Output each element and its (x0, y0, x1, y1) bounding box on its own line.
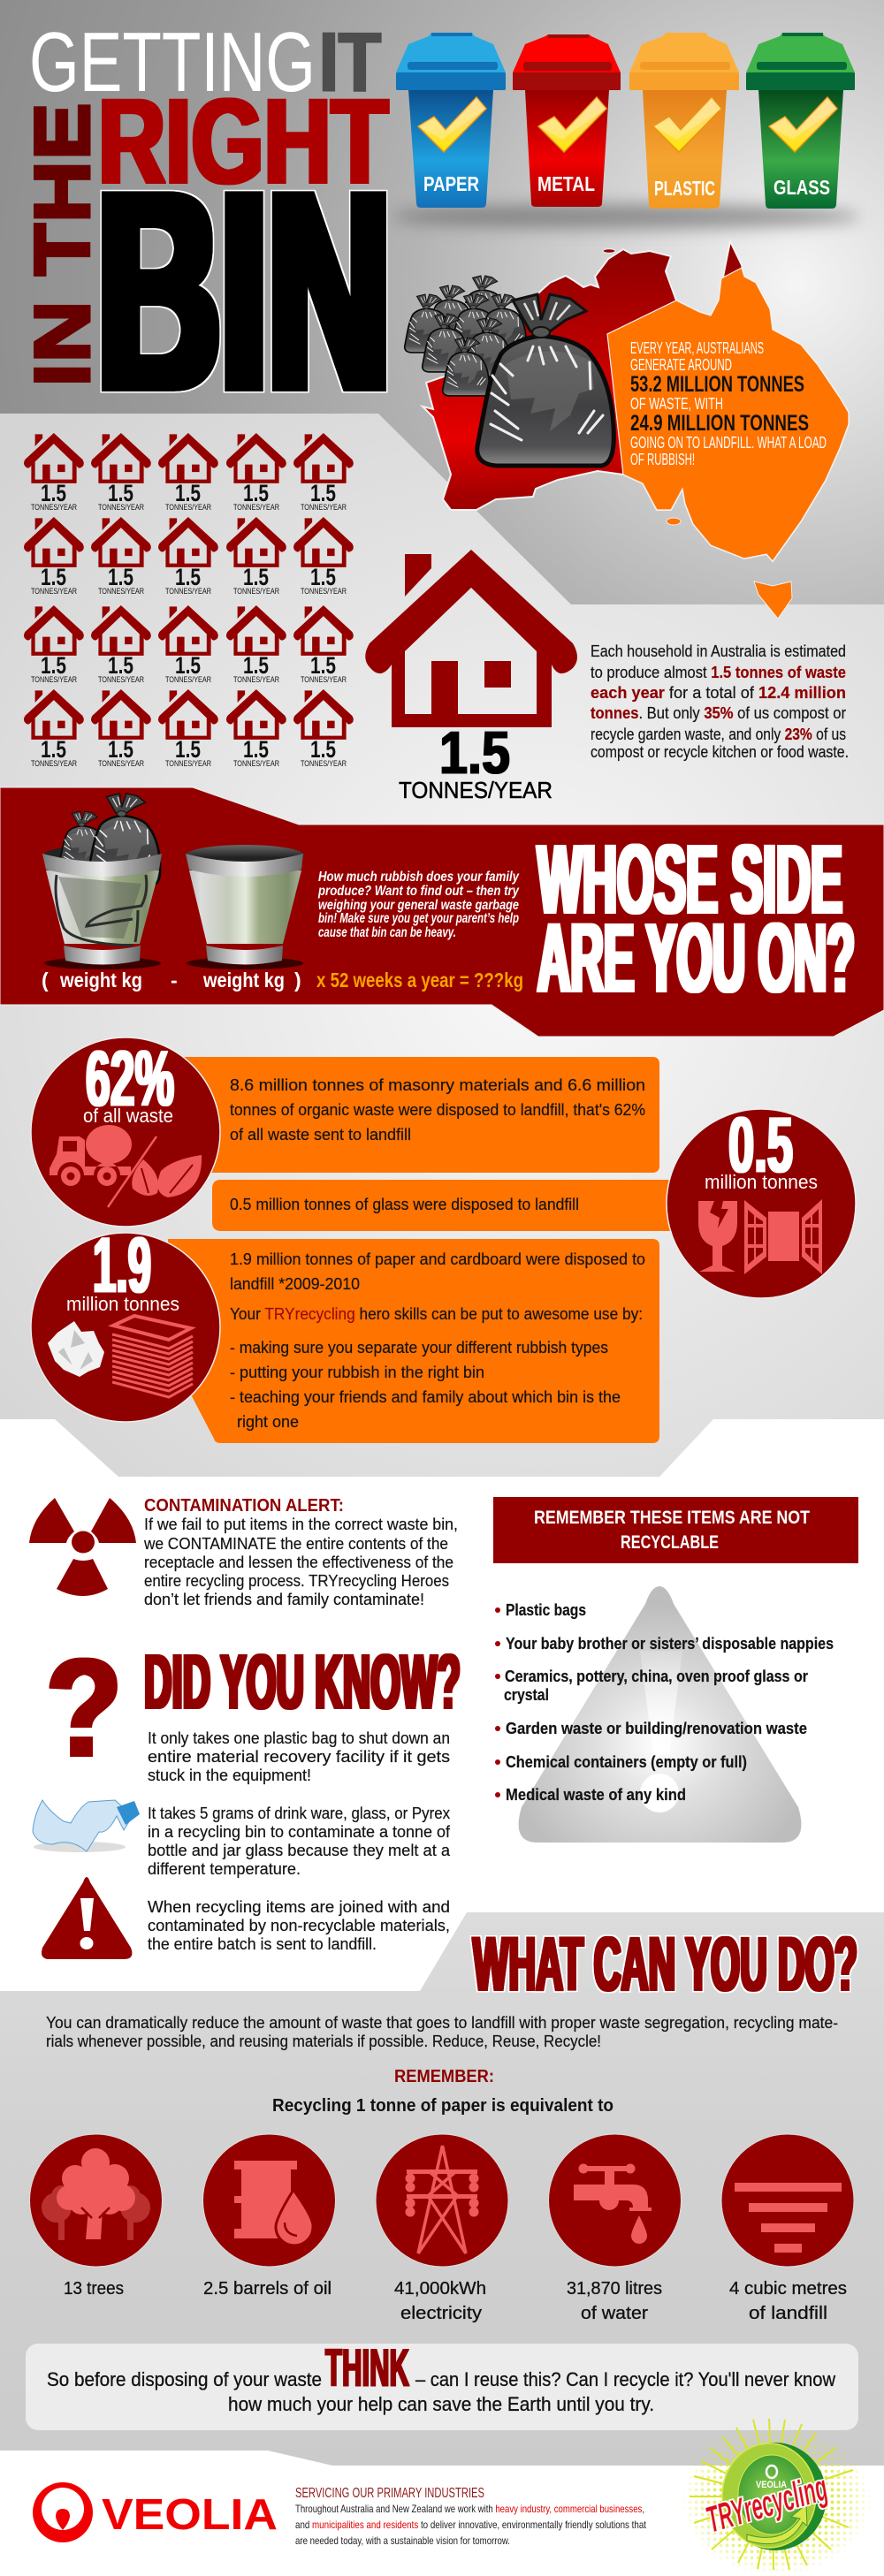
text: weight formula: x 52 weeks a year = ???kg (316, 969, 523, 992)
list: non recyclable items: Ceramics, pottery, china, oven proof glass or (505, 1667, 808, 1685)
list: non recyclable items: Medical waste of any kind (506, 1785, 686, 1804)
house 9: TONNES/YEAR (233, 587, 279, 596)
house 14: 1.5 (243, 652, 269, 679)
house 15 (293, 605, 354, 684)
house 4: TONNES/YEAR (233, 503, 279, 512)
map of Australia (423, 241, 849, 619)
icon: large rubbish bag (477, 294, 613, 466)
icon: grey warning triangle (519, 1586, 801, 1843)
text: contaminated batch fact (148, 1897, 450, 1953)
text: household waste paragraph: to produce almost 1.5 tonnes of waste (591, 663, 846, 681)
house 12 (91, 605, 151, 684)
house 15: 1.5 (310, 652, 336, 679)
text: contamination alert: don’t let friends and family contaminate! (144, 1590, 424, 1608)
house 3: 1.5 (175, 480, 201, 506)
circle: 13 trees: 13 trees (64, 2279, 124, 2299)
text: yearly waste on the map: OF RUBBISH! (630, 451, 695, 468)
house 9 (226, 517, 286, 596)
text: weight formula: - (171, 969, 178, 992)
logo: TRYrecycling badge (681, 2419, 872, 2576)
text: yearly waste on the map (630, 339, 827, 468)
icon: dripping tap (574, 2163, 652, 2244)
circle: 4 cubic metres of landfill (721, 2134, 854, 2323)
icon: barrel and drop (234, 2161, 313, 2245)
house 5: TONNES/YEAR (301, 503, 347, 512)
circle: 2.5 barrels of oil (203, 2134, 336, 2299)
text: reduce reuse recycle: You can dramatically reduce the amount of waste that goes to landfill with proper waste segregation, recycling mate- (46, 2013, 838, 2032)
text: plastic bag fact: entire material recovery facility if it gets (148, 1747, 450, 1766)
circle: 62% of all waste (31, 1034, 220, 1227)
text: pyrex fact: in a recycling bin to contaminate a tonne of (148, 1822, 451, 1841)
icon: question mark: ? (46, 1630, 122, 1786)
house 6 (24, 517, 84, 596)
house 11: TONNES/YEAR (31, 675, 77, 684)
callout: think before disposing: So before disposing of your waste (47, 2368, 322, 2390)
house 13: TONNES/YEAR (165, 675, 211, 684)
house 17: TONNES/YEAR (98, 759, 144, 768)
text: household waste paragraph: each year for a total of 12.4 million (591, 683, 846, 702)
circle: 41,000 kWh electricity (376, 2134, 508, 2323)
house 12: TONNES/YEAR (98, 675, 144, 684)
house 12: 1.5 (108, 652, 133, 679)
circle: 62% of all waste: of all waste (83, 1105, 173, 1127)
house 19: TONNES/YEAR (233, 759, 279, 768)
icon: slash between truck and leaves (108, 1136, 156, 1207)
house 8: TONNES/YEAR (165, 587, 211, 596)
text: how much rubbish (317, 870, 520, 940)
logo: Veolia (33, 2482, 278, 2542)
house 17: 1.5 (108, 736, 133, 763)
text: household waste paragraph: recycle garden waste, and only 23% of us (591, 725, 846, 743)
text: weight formula: ( (42, 969, 49, 992)
icon: full bin with bags (42, 794, 162, 969)
circle: 13 trees (30, 2134, 163, 2299)
title: Getting it right in the bin: RIGHT (98, 74, 388, 209)
circle: 41,000 kWh electricity: electricity (400, 2304, 482, 2323)
house 20: TONNES/YEAR (301, 759, 347, 768)
icon: small rubbish bags (405, 276, 526, 396)
text: recycling 1 tonne of paper: Recycling 1 tonne of paper is equivalent to (272, 2096, 613, 2116)
circle: 4 cubic metres of landfill: 4 cubic metres (729, 2279, 847, 2299)
house 1: 1.5 (41, 480, 66, 506)
callout: think before disposing: – can I reuse this? Can I recycle it? You'll never know (415, 2368, 835, 2390)
heading: whose side are you on (537, 825, 855, 1013)
icon: stack of paper (112, 1316, 193, 1397)
house 14: TONNES/YEAR (233, 675, 279, 684)
text: reduce reuse recycle: rials whenever possible, and reusing materials if possible. Reduce, Reuse, Recycle! (46, 2032, 601, 2050)
icon: open window (744, 1199, 822, 1274)
text: pyrex fact: different temperature. (148, 1859, 301, 1878)
text: contaminated batch fact: contaminated by non-recyclable materials, (148, 1916, 450, 1934)
text: weight formula: weight kg (59, 969, 142, 992)
circle: 0.5 million tonnes: million tonnes (705, 1171, 818, 1193)
panel: paper and cardboard: - making sure you separate your different rubbish types (230, 1338, 608, 1356)
house 8 (158, 517, 218, 596)
house 18: 1.5 (175, 736, 201, 763)
text: how much rubbish: weighing your general waste garbage (318, 898, 519, 913)
icon: landfill layers (735, 2183, 842, 2253)
list: non recyclable items: Garden waste or building/renovation waste (506, 1719, 807, 1737)
text: yearly waste on the map: EVERY YEAR, AUSTRALIANS (630, 339, 764, 357)
house 7 (91, 517, 151, 596)
house 4: 1.5 (243, 480, 269, 506)
callout: think before disposing: THINK (325, 2338, 409, 2397)
callout: think before disposing (26, 2338, 858, 2430)
callout: think before disposing: how much your help can save the Earth until you try. (228, 2393, 654, 2415)
house 19: 1.5 (243, 736, 269, 763)
panel: paper and cardboard: - teaching your friends and family about which bin is the (230, 1387, 621, 1406)
list: non recyclable items: Chemical containers (empty or full) (506, 1752, 747, 1771)
text: contamination alert: entire recycling process. TRYrecycling Heroes (144, 1571, 449, 1590)
panel: paper and cardboard: - putting your rubbish in the right bin (230, 1363, 484, 1381)
text: contaminated batch fact: the entire batch is sent to landfill. (148, 1934, 377, 1953)
list: non recyclable items: Your baby brother or sisters’ disposable nappies (506, 1634, 834, 1653)
panel: masonry and organic waste: of all waste sent to landfill (230, 1125, 411, 1144)
text: contamination alert: we CONTAMINATE the entire contents of the (143, 1534, 448, 1553)
house 7: 1.5 (108, 564, 133, 590)
logo: TRYrecycling badge: VEOLIA (756, 2480, 787, 2490)
icon: empty bin (186, 845, 304, 969)
icon: red metal bin: METAL (537, 172, 595, 195)
text: contamination alert (143, 1496, 458, 1608)
circle: 0.5 million tonnes (667, 1100, 856, 1298)
text: plastic bag fact: It only takes one plastic bag to shut down an (148, 1729, 450, 1747)
title: Getting it right in the bin: IT (319, 15, 381, 110)
list: non recyclable items: Plastic bags (506, 1600, 586, 1619)
house 20 (293, 689, 354, 768)
text: household waste paragraph: compost or recycle kitchen or food waste. (591, 742, 849, 761)
house 3 (158, 433, 218, 512)
text: plastic bag fact: stuck in the equipment! (148, 1766, 311, 1784)
text: plastic bag fact (148, 1729, 450, 1784)
house 2: TONNES/YEAR (98, 503, 144, 512)
house 16: TONNES/YEAR (31, 759, 77, 768)
panel: masonry and organic waste (177, 1057, 659, 1173)
text: how much rubbish: produce? Want to find out – then try (317, 884, 520, 899)
background: white contamination panel (0, 1419, 884, 1991)
circle: 31,870 litres of water: 31,870 litres (567, 2279, 662, 2299)
panel: paper and cardboard: 1.9 million tonnes of paper and cardboard were disposed to (230, 1250, 645, 1268)
panel: paper and cardboard: Your TRYrecycling hero skills can be put to awesome use by: (230, 1304, 643, 1323)
text: yearly waste on the map: OF WASTE, WITH (630, 395, 723, 413)
text: how much rubbish: How much rubbish does your family (318, 870, 520, 885)
text: yearly waste on the map: GENERATE AROUND (630, 356, 732, 374)
big house with 1.5 tonnes/year: 1.5 (439, 719, 510, 786)
house 7: TONNES/YEAR (98, 587, 144, 596)
icon: crumpled paper (48, 1321, 104, 1377)
house 10: 1.5 (310, 564, 336, 590)
house 15: TONNES/YEAR (301, 675, 347, 684)
circle: 0.5 million tonnes: 0.5 (728, 1100, 793, 1189)
icon: orange plastic bin: PLASTIC (654, 177, 715, 200)
panel: paper and cardboard (168, 1239, 659, 1443)
panel: glass waste: 0.5 million tonnes of glass were disposed to landfill (230, 1195, 579, 1213)
icon: power pylon (405, 2146, 479, 2253)
panel: glass waste (212, 1180, 681, 1231)
circle: 1.9 million tonnes: 1.9 (93, 1220, 151, 1309)
house 20: 1.5 (310, 736, 336, 763)
circle: 41,000 kWh electricity: 41,000kWh (394, 2279, 486, 2299)
house 13 (158, 605, 218, 684)
house 16: 1.5 (41, 736, 66, 763)
icon: radiation symbol (29, 1498, 136, 1596)
house 5: 1.5 (310, 480, 336, 506)
house 18 (158, 689, 218, 768)
text: household waste paragraph: Each household in Australia is estimated (591, 642, 846, 660)
text: weight formula: ) (294, 969, 301, 992)
title: Getting it right in the bin: BIN (97, 134, 391, 448)
text: household waste paragraph: tonnes. But only 35% of us compost or (591, 703, 846, 722)
text: servicing our primary industries: and municipalities and residents to deliver innovative, environmentally friendly solutions that (295, 2519, 647, 2531)
house 13: 1.5 (175, 652, 201, 679)
icon: red warning triangle (42, 1877, 132, 1959)
house grid: 20 households (24, 433, 354, 768)
icon: blue paper bin: PAPER (423, 172, 479, 195)
circle: 62% of all waste: 62% (86, 1034, 174, 1122)
big house with 1.5 tonnes/year: TONNES/YEAR (399, 777, 552, 803)
text: servicing our primary industries: Throughout Australia and New Zealand we work with heavy industry, commercial businesses, (295, 2503, 644, 2515)
text: how much rubbish: cause that bin can be heavy. (318, 925, 456, 940)
text: pyrex fact (148, 1804, 451, 1878)
house 4 (226, 433, 286, 512)
text: yearly waste on the map: 53.2 MILLION TONNES (630, 372, 804, 397)
icon: green glass bin (746, 33, 855, 209)
panel: masonry and organic waste: 8.6 million tonnes of masonry materials and 6.6 million (230, 1075, 645, 1094)
house 17 (91, 689, 151, 768)
text: pyrex fact: It takes 5 grams of drink ware, glass, or Pyrex (148, 1804, 451, 1822)
house 19 (226, 689, 286, 768)
house 5 (293, 433, 354, 512)
icon: red metal bin (513, 34, 621, 207)
text: how much rubbish: bin! Make sure you get your parent’s help (318, 911, 519, 926)
text: household waste paragraph (591, 642, 849, 761)
circle: 1.9 million tonnes: million tonnes (66, 1293, 179, 1315)
background: light grey middle panel (0, 407, 884, 1478)
house 14 (226, 605, 286, 684)
circle: 31,870 litres of water: of water (581, 2304, 648, 2323)
heading: did you know: DID YOU KNOW? (144, 1639, 461, 1725)
house 10 (293, 517, 354, 596)
house 10: TONNES/YEAR (301, 587, 347, 596)
icon: green glass bin: GLASS (774, 176, 830, 199)
panel: paper and cardboard: right one (237, 1412, 299, 1431)
background: grey what-can-you-do panel (0, 1912, 884, 2466)
house 16 (24, 689, 84, 768)
circle: 1.9 million tonnes (31, 1220, 220, 1422)
background: top grey panel (0, 0, 884, 604)
panel: masonry and organic waste: tonnes of organic waste were disposed to landfill, that's 62% (230, 1100, 645, 1119)
list: non recyclable items: crystal (504, 1685, 549, 1704)
house 2: 1.5 (108, 480, 133, 506)
house 11: 1.5 (41, 652, 66, 679)
text: servicing our primary industries: are needed today, with a sustainable vision for tomorrow. (295, 2534, 510, 2547)
icon: leaves (132, 1155, 202, 1197)
title: Getting it right in the bin (20, 15, 391, 448)
panel: whose side are you on (0, 787, 884, 1037)
big house with 1.5 tonnes/year (365, 550, 577, 803)
house 9: 1.5 (243, 564, 269, 590)
house 18: TONNES/YEAR (165, 759, 211, 768)
circle: 2.5 barrels of oil: 2.5 barrels of oil (203, 2279, 332, 2299)
text: servicing our primary industries (295, 2486, 647, 2547)
circle: 31,870 litres of water (548, 2134, 681, 2323)
text: reduce reuse recycle (46, 2013, 838, 2050)
title: Getting it right in the bin: IN THE (20, 103, 105, 387)
text: remember: REMEMBER: (394, 2067, 494, 2086)
panel: paper and cardboard: landfill *2009-2010 (230, 1274, 360, 1293)
house 6: 1.5 (41, 564, 66, 590)
text: contamination alert: receptacle and lessen the effectiveness of the (144, 1553, 453, 1571)
text: yearly waste on the map: 24.9 MILLION TONNES (630, 411, 809, 436)
text: weight formula: weight kg (202, 969, 285, 992)
circle: 4 cubic metres of landfill: of landfill (749, 2304, 827, 2323)
house 1 (24, 433, 84, 512)
text: pyrex fact: bottle and jar glass because they melt at a (148, 1841, 451, 1859)
icon: orange plastic bin (629, 33, 739, 209)
icon: trees (42, 2148, 150, 2240)
icon: broken wine glass (698, 1201, 737, 1272)
title: Getting it right in the bin: GETTING (29, 15, 316, 110)
icon: blue paper bin (396, 33, 506, 208)
heading: remember these items are not recyclable: REMEMBER THESE ITEMS ARE NOT (534, 1508, 810, 1528)
house 6: TONNES/YEAR (31, 587, 77, 596)
house 11 (24, 605, 84, 684)
heading: remember these items are not recyclable (493, 1497, 858, 1563)
shadow under bins (392, 204, 860, 229)
logo: Veolia: VEOLIA (102, 2491, 278, 2539)
icon: crushed plastic bottle (33, 1800, 140, 1852)
house 1: TONNES/YEAR (31, 503, 77, 512)
text: weight formula (42, 969, 523, 992)
text: contamination alert: CONTAMINATION ALERT: (144, 1496, 344, 1516)
heading: remember these items are not recyclable: RECYCLABLE (621, 1532, 719, 1553)
text: servicing our primary industries: SERVICING OUR PRIMARY INDUSTRIES (295, 2486, 484, 2501)
text: contamination alert: If we fail to put items in the correct waste bin, (144, 1515, 458, 1533)
house 2 (91, 433, 151, 512)
icon: cement truck (50, 1125, 132, 1186)
list: non recyclable items (495, 1600, 834, 1804)
house 8: 1.5 (175, 564, 201, 590)
house 3: TONNES/YEAR (165, 503, 211, 512)
text: contaminated batch fact: When recycling items are joined with and (148, 1897, 450, 1916)
